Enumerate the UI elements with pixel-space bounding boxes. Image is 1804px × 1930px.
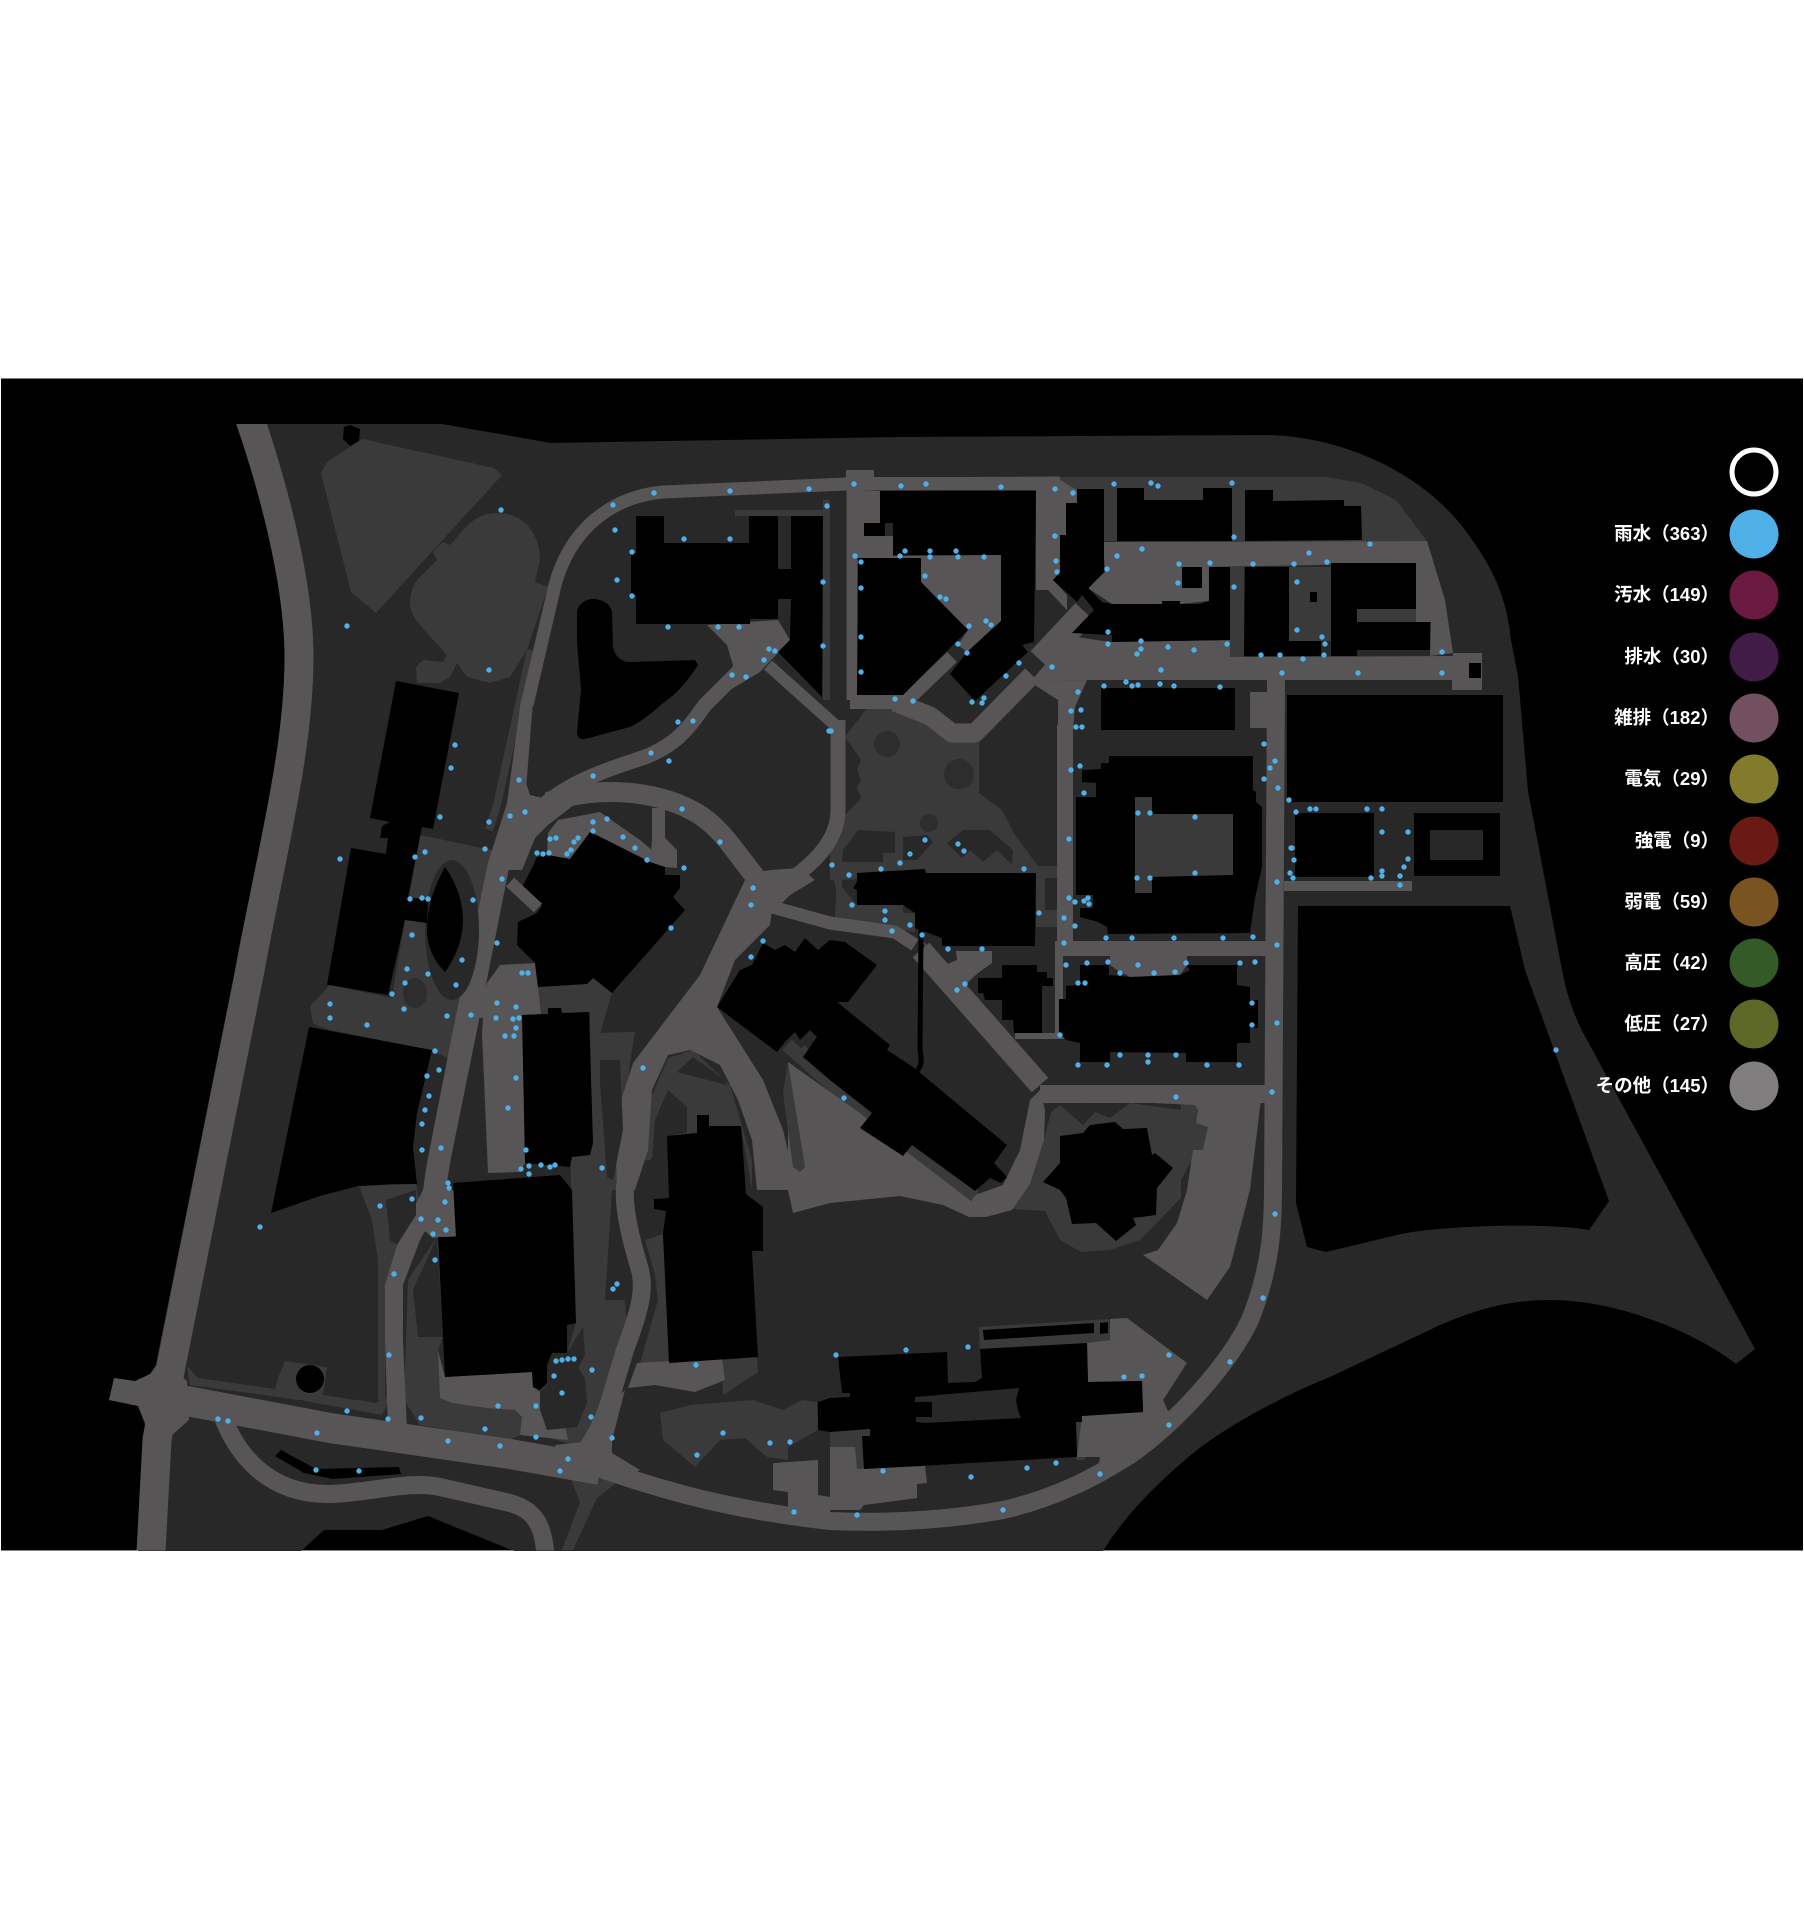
building: north center L <box>864 491 1036 701</box>
small black pit north <box>343 425 360 446</box>
small black pit at southwest block <box>296 1365 324 1393</box>
legend: electricity: 電気（29） <box>1624 768 1719 789</box>
building: hexagonal hall <box>1043 1122 1173 1241</box>
paved area: forecourts <box>473 963 541 1173</box>
paved area: ring around hexagonal building <box>788 1062 1045 1217</box>
dark pockets and planted circles <box>386 731 1483 1430</box>
stormwater inlet points <box>218 489 829 1512</box>
legend: sewage <box>1614 570 1778 620</box>
buildings: north east row <box>1117 488 1232 541</box>
legend: heavy current <box>1635 816 1778 866</box>
courtyard lens <box>427 867 463 972</box>
building: north <box>631 516 823 697</box>
road: central junction blob <box>764 868 815 903</box>
legend: miscellaneous drainage: 雑排（182） <box>1614 707 1719 728</box>
building: north east of junction <box>1053 489 1104 602</box>
building: top rect east <box>1101 688 1235 730</box>
legend: drainage <box>1624 632 1778 682</box>
road: north ring road <box>527 483 1060 705</box>
paved area: east lawn <box>1143 1103 1261 1300</box>
road: plaza approach <box>850 657 952 702</box>
road: south junction blob <box>555 1390 640 1480</box>
building: center <box>853 869 1036 946</box>
road: diagonal and arch south of the junction <box>615 880 793 1190</box>
legend: sewage: 汚水（149） <box>1614 584 1719 605</box>
legend: low pressure: 低圧（27） <box>1624 1013 1719 1034</box>
building: south court <box>1059 965 1258 1062</box>
buildings and water bodies <box>271 425 1609 1479</box>
building: central diagonal <box>717 938 1007 1191</box>
legend: heavy current: 強電（9） <box>1635 830 1719 851</box>
building: central star <box>517 832 685 993</box>
legend: other <box>1596 1062 1778 1110</box>
legend: low pressure <box>1624 1000 1778 1048</box>
legend: rainwater: 雨水（363） <box>1614 523 1719 544</box>
buildings: east blocks <box>1287 695 1503 802</box>
legend: high pressure: 高圧（42） <box>1624 952 1719 973</box>
building: large south block <box>438 1175 576 1390</box>
road spur over central star <box>510 882 538 908</box>
road: south and east ring road <box>590 680 1276 1522</box>
roads and paved areas <box>109 410 1482 1570</box>
building: west long wing <box>327 681 459 995</box>
legend: weak current <box>1624 878 1778 926</box>
legend: all toggle ring <box>1732 450 1776 494</box>
building: south central <box>654 1115 763 1363</box>
building: southeast complex <box>830 1343 1143 1469</box>
paved courtyards and plazas <box>187 439 1427 1550</box>
stormwater inlet points, east half <box>831 483 1556 1515</box>
legend <box>1596 450 1778 1110</box>
campus ground <box>109 424 1755 1551</box>
building: southwest block <box>271 1027 432 1213</box>
legend: high pressure <box>1624 938 1778 988</box>
pond <box>577 599 698 739</box>
panel: map background <box>1 378 1803 1550</box>
road: west perimeter road <box>150 410 299 1570</box>
legend: other: その他（145） <box>1596 1075 1719 1096</box>
legend: electricity <box>1624 754 1778 804</box>
light courtyard in north building <box>850 490 1001 652</box>
legend: drainage: 排水（30） <box>1624 646 1719 667</box>
road: northwest diagonal around the pond <box>541 666 733 798</box>
road: eastern connectors <box>1035 680 1087 729</box>
road: southwest loop <box>215 1422 554 1550</box>
legend: weak current: 弱電（59） <box>1624 891 1719 912</box>
building: north-west tower block <box>522 1008 593 1167</box>
building: east court <box>1076 756 1262 934</box>
road: diagonal to south-east <box>921 950 1040 1085</box>
road: inner west road <box>385 700 533 1430</box>
pond strip in southwest loop <box>275 1450 401 1479</box>
legend: miscellaneous drainage <box>1614 694 1778 742</box>
legend: rainwater <box>1614 510 1778 558</box>
road: west junction at the edge <box>109 1365 189 1434</box>
road: southwest trunk road <box>150 1394 600 1470</box>
road: central east-west road <box>1030 636 1482 690</box>
road: central north-south roads <box>793 720 846 875</box>
